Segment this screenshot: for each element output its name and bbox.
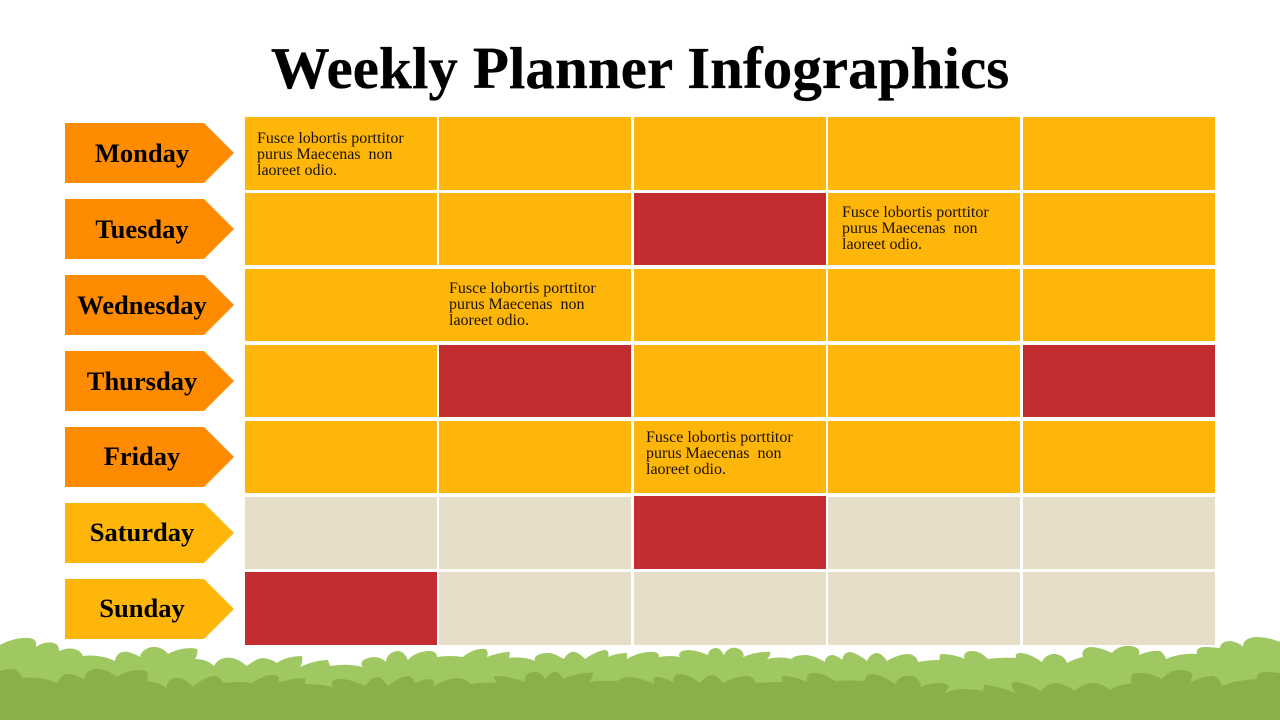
Tuesday cell 4 with note: Fusce lobortis porttitor (842, 204, 989, 221)
arrow label: Thursday (65, 351, 234, 411)
Friday cell 4 (828, 421, 1020, 493)
Friday cell 3 with note (634, 421, 826, 493)
Thursday cell 2 red (439, 345, 631, 417)
Sunday cell 2 (439, 572, 631, 645)
Wednesday merged cell with note: Fusce lobortis porttitor (449, 280, 596, 297)
front grass layer (0, 669, 1280, 720)
arrow label: Friday: Friday (104, 441, 180, 471)
Wednesday merged cell with note (245, 269, 631, 341)
Thursday cell 5 red (1023, 345, 1215, 417)
Thursday cell 1 (245, 345, 437, 417)
Monday cell 1 with note: Fusce lobortis porttitor (257, 130, 404, 147)
Saturday cell 1 (245, 497, 437, 569)
arrow label: Tuesday: Tuesday (95, 214, 189, 244)
title: Weekly Planner Infographics (271, 35, 1009, 101)
Thursday cell 4 (828, 345, 1020, 417)
Monday cell 1 with note: purus Maecenas non (257, 146, 393, 163)
arrow label: Monday (65, 123, 234, 183)
Friday cell 2 (439, 421, 631, 493)
Tuesday cell 3 red (634, 193, 826, 265)
Wednesday cell 4 (828, 269, 1020, 341)
arrow label: Thursday: Thursday (87, 366, 197, 396)
Sunday cell 3 (634, 572, 826, 645)
arrow label: Saturday: Saturday (90, 517, 194, 547)
Sunday cell 4 (828, 572, 1020, 645)
Saturday cell 5 (1023, 497, 1215, 569)
Monday cell 4 (828, 117, 1020, 190)
Monday cell 1 with note: laoreet odio. (257, 162, 337, 179)
arrow label: Tuesday (65, 199, 234, 259)
Friday cell 3 with note: purus Maecenas non (646, 445, 782, 462)
Tuesday cell 4 with note: laoreet odio. (842, 236, 922, 253)
Tuesday cell 1 (245, 193, 437, 265)
Wednesday cell 5 (1023, 269, 1215, 341)
Friday cell 3 with note: Fusce lobortis porttitor (646, 429, 793, 446)
Friday cell 3 with note: laoreet odio. (646, 461, 726, 478)
Monday cell 5 (1023, 117, 1215, 190)
Saturday cell 3 red (634, 496, 826, 569)
Tuesday cell 2 (439, 193, 631, 265)
back grass layer (0, 637, 1280, 720)
Wednesday merged cell with note: purus Maecenas non (449, 296, 585, 313)
arrow label: Wednesday (65, 275, 234, 335)
Friday cell 5 (1023, 421, 1215, 493)
Saturday cell 4 (828, 497, 1020, 569)
Thursday cell 3 (634, 345, 826, 417)
Saturday cell 2 (439, 497, 631, 569)
arrow label: Sunday (65, 579, 234, 639)
arrow label: Monday: Monday (95, 138, 189, 168)
Tuesday cell 4 with note: purus Maecenas non (842, 220, 978, 237)
arrow label: Saturday (65, 503, 234, 563)
arrow label: Sunday: Sunday (99, 593, 185, 623)
Monday cell 1 with note (245, 117, 437, 190)
Wednesday merged cell with note: laoreet odio. (449, 312, 529, 329)
Sunday cell 5 (1023, 572, 1215, 645)
grass illustration (0, 637, 1280, 720)
Friday cell 1 (245, 421, 437, 493)
Monday cell 3 (634, 117, 826, 190)
arrow label: Friday (65, 427, 234, 487)
Tuesday cell 5 (1023, 193, 1215, 265)
planner grid (245, 117, 1215, 645)
Wednesday cell 3 (634, 269, 826, 341)
Tuesday cell 4 with note (828, 193, 1020, 265)
arrow label: Wednesday: Wednesday (77, 290, 207, 320)
Sunday cell 1 red (245, 572, 437, 645)
Monday cell 2 (439, 117, 631, 190)
